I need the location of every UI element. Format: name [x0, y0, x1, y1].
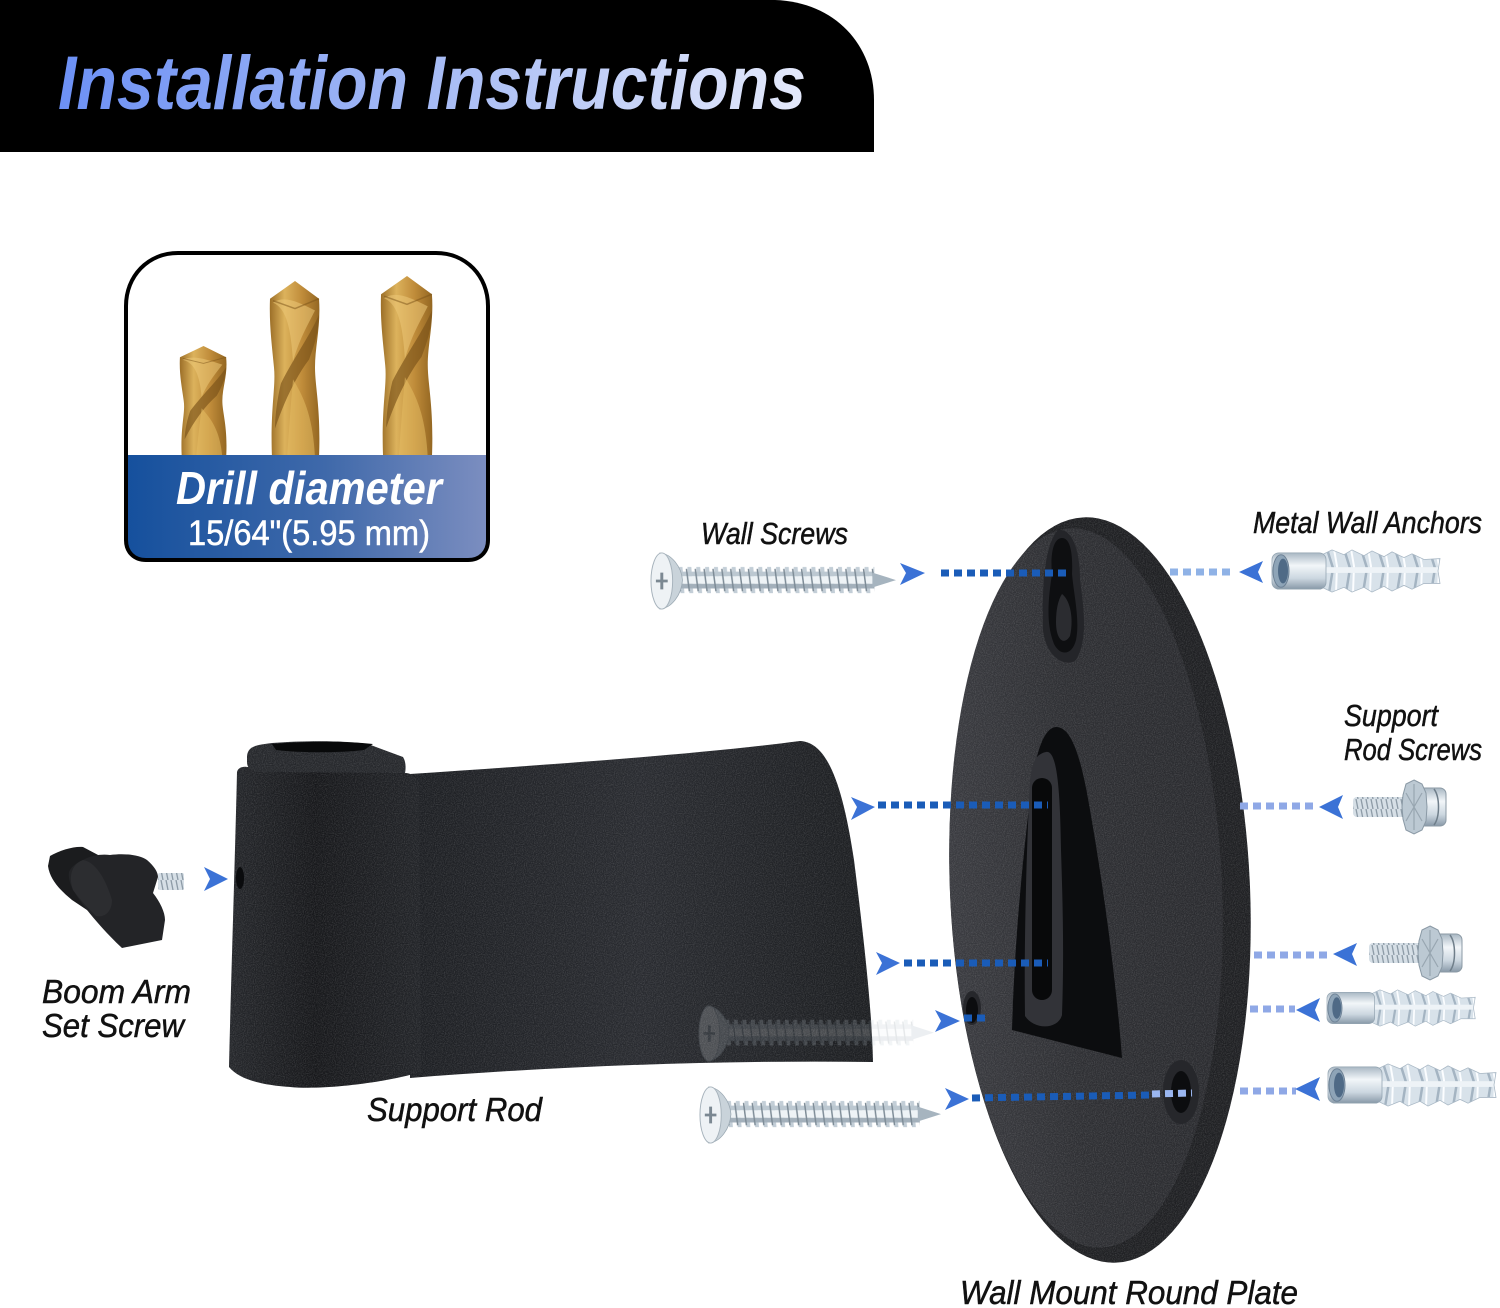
label: boom arm set screw: Set Screw	[42, 1007, 186, 1044]
title banner	[0, 0, 874, 152]
icon: support rod screw top	[1353, 780, 1446, 834]
drill size: 15/64"(5.95 mm)	[188, 514, 430, 553]
wall mount round plate	[934, 511, 1266, 1269]
arrows	[204, 561, 1357, 1110]
label: support rod: Support Rod	[367, 1091, 544, 1128]
title: Installation Instructions	[58, 41, 806, 126]
icon: metal anchor middle	[1327, 990, 1475, 1026]
icon: metal anchor top	[1272, 550, 1440, 592]
support rod	[229, 741, 934, 1088]
label: support rod screws: Support	[1344, 698, 1439, 733]
label: wall screws: Wall Screws	[701, 516, 848, 551]
label: support rod screws	[1344, 698, 1482, 767]
icon: drill bits	[180, 276, 432, 458]
icon: wall screw top	[651, 553, 896, 609]
drill caption band	[126, 455, 488, 560]
icon: boom arm set screw	[48, 847, 184, 948]
icon: metal anchor bottom	[1328, 1064, 1496, 1106]
screw passing behind rod	[699, 1006, 934, 1061]
icon: support rod screw bottom	[1369, 926, 1462, 980]
screw holes	[963, 991, 1199, 1124]
label: boom arm set screw	[42, 973, 191, 1044]
icon: wall screw bottom	[700, 1087, 941, 1143]
panel: drill diameter	[126, 253, 488, 560]
drill heading: Drill diameter	[176, 462, 444, 514]
central mount bracket	[1012, 727, 1122, 1058]
dotted guide lines	[878, 572, 1328, 1098]
label: boom arm set screw: Boom Arm	[42, 973, 191, 1010]
keyhole slot	[1043, 530, 1084, 663]
